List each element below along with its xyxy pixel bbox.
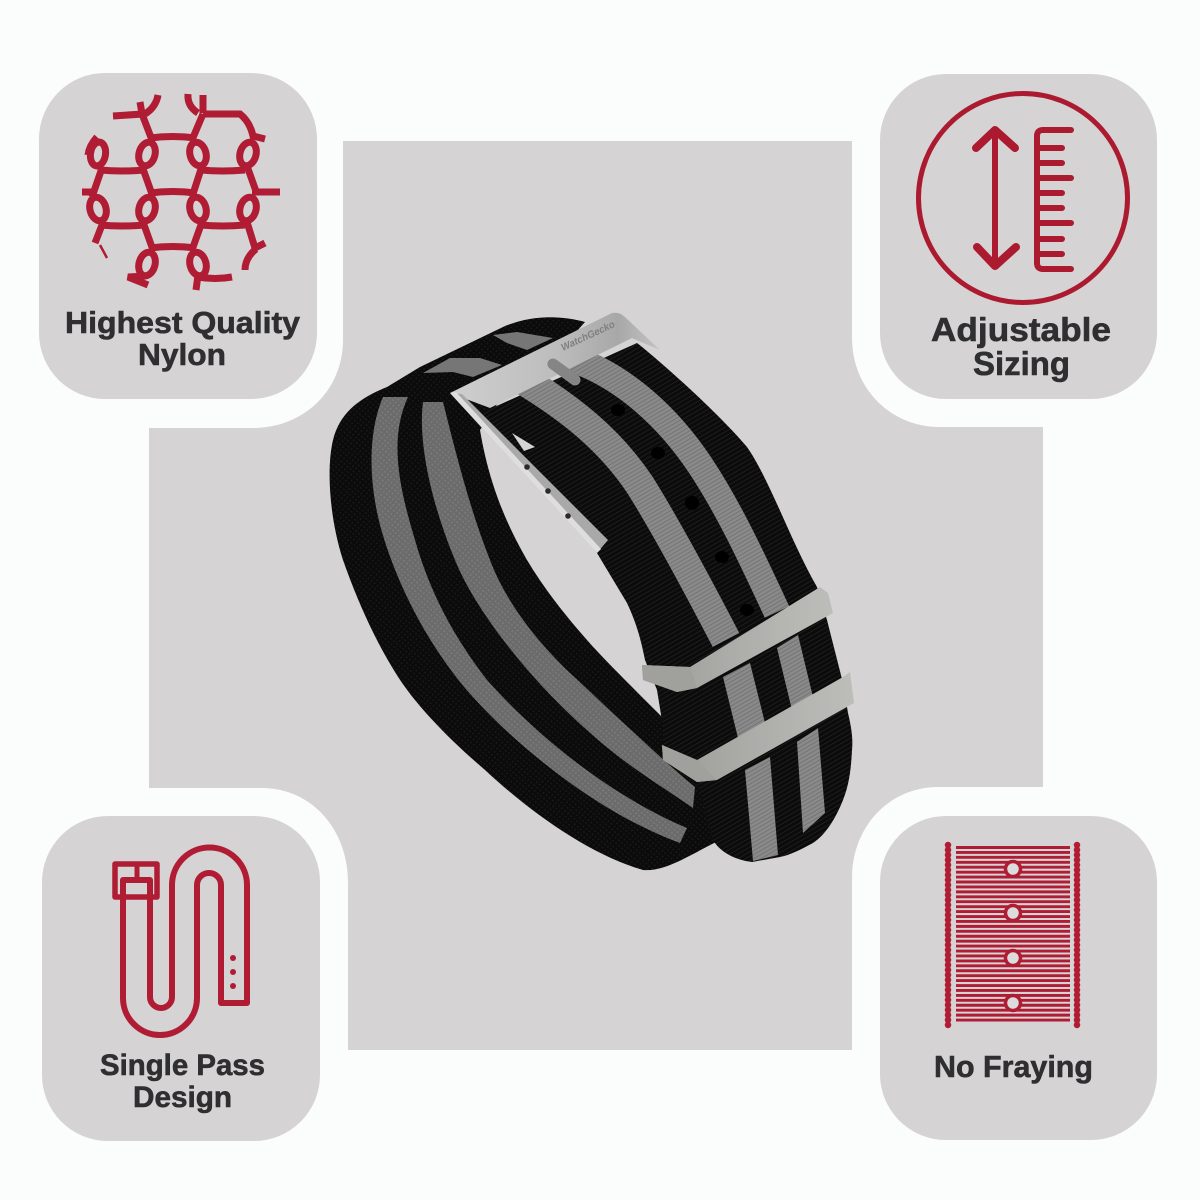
central grey cross panel [149,141,1043,1050]
label: adjustable sizing: Sizing [973,345,1070,382]
label: adjustable sizing [931,311,1111,382]
metal buckle [450,313,660,553]
icon: adjustable sizing gauge [918,94,1128,302]
front grey stripe two upper [570,358,777,612]
front grey stripe one lower [745,757,778,861]
label: single pass design [100,1049,265,1114]
label: single pass design: Single Pass [100,1049,265,1082]
icon: single pass strap [115,848,247,1035]
top grey stripe segment two [493,332,553,350]
strap holes [611,404,754,616]
icon: woven nylon mesh [82,94,280,290]
panel: single pass design [42,816,320,1141]
front grey stripe one middle [723,663,765,738]
panel: highest quality nylon [39,73,317,399]
panel: no fraying [880,816,1157,1140]
panel: adjustable sizing [880,74,1157,399]
top grey stripe segment one [423,358,502,377]
front grey stripe one upper [520,378,726,640]
buckle engraving: WatchGecko [560,319,617,354]
buckle rivets [524,464,571,519]
product photo: nylon watch strap [330,313,854,870]
back strap grey stripe inner [422,402,695,808]
strap back loop [330,317,716,870]
label: no fraying: No Fraying [934,1049,1093,1084]
icon: no fraying woven edge [948,845,1077,1026]
back strap grey stripe outer [372,397,687,843]
front grey stripe two middle [777,635,813,710]
label: highest quality nylon: Highest Quality [65,305,301,340]
buckle pin [553,364,575,380]
label: highest quality nylon [65,305,301,372]
label: single pass design: Design [133,1081,232,1114]
small gap under buckle [512,433,535,451]
front grey stripe two lower [797,728,825,833]
lower metal keeper [662,672,854,782]
upper metal keeper [642,587,833,692]
label: adjustable sizing: Adjustable [931,311,1111,348]
strap front section [480,343,852,862]
label: highest quality nylon: Nylon [138,337,226,372]
